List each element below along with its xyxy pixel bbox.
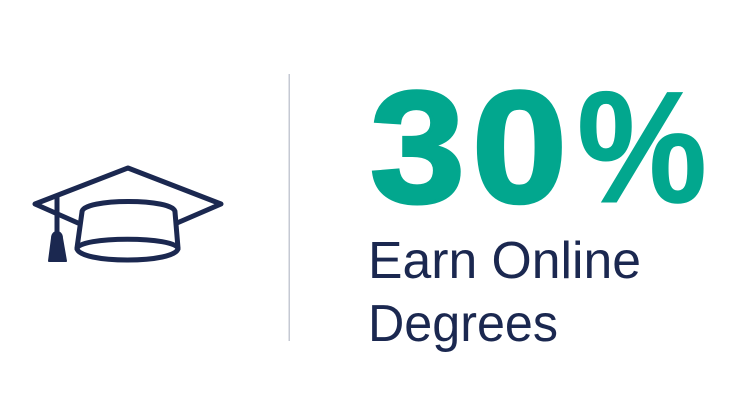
statistic: 30%: 0: [472, 58, 567, 236]
icon: graduation cap: [35, 168, 221, 261]
divider: [288, 74, 290, 341]
statistic: 30%: 3: [370, 58, 465, 236]
statistic: 30%: [370, 58, 707, 236]
caption: [368, 232, 641, 353]
caption: Degrees: [368, 295, 558, 353]
caption: Earn Online: [368, 232, 641, 290]
statistic: 30%: %: [577, 58, 707, 236]
